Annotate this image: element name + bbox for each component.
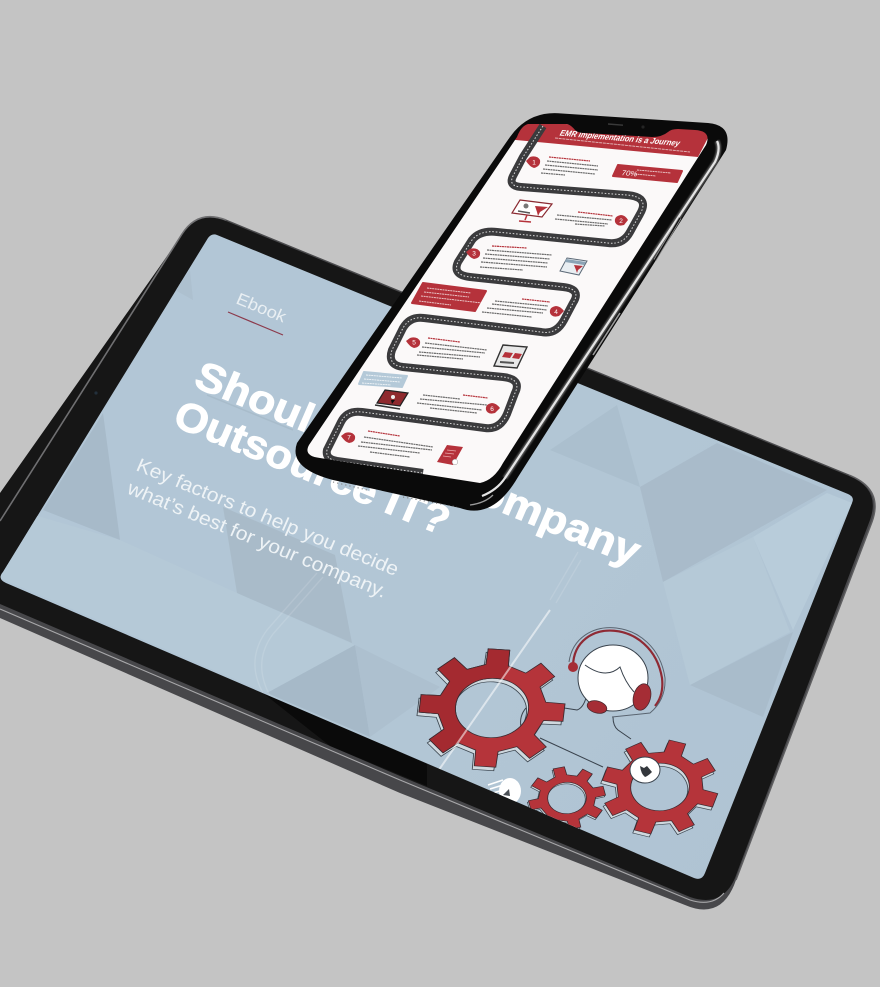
step marker 6: 6 bbox=[490, 406, 494, 413]
header band bbox=[515, 124, 708, 157]
tablet edge highlights bbox=[0, 217, 875, 902]
tablet black bezel bbox=[0, 218, 873, 900]
step marker 4 bbox=[550, 306, 564, 317]
microphone bbox=[586, 700, 608, 714]
step 4 copy lines bbox=[482, 299, 550, 317]
step marker 3 bbox=[466, 248, 480, 259]
tablet metal body bbox=[0, 217, 875, 909]
screen base bbox=[0, 220, 870, 890]
step marker 1: 1 bbox=[532, 160, 536, 166]
polygon facet background bbox=[0, 270, 852, 737]
step marker 5 bbox=[406, 337, 420, 348]
step marker 4: 4 bbox=[554, 309, 558, 316]
icon: red document bbox=[437, 445, 463, 465]
phone body bbox=[296, 113, 728, 511]
tablet bbox=[0, 217, 875, 909]
gear: large bbox=[416, 648, 566, 772]
connecting wires bbox=[521, 698, 631, 767]
tablet camera bbox=[94, 391, 98, 395]
shield badge bbox=[630, 757, 660, 783]
step 6 copy lines bbox=[417, 395, 488, 413]
headband outline bbox=[569, 628, 665, 717]
screen paper bbox=[307, 124, 708, 483]
icon: monitor with funnel bbox=[512, 200, 552, 222]
tablet screen bbox=[0, 220, 870, 890]
ear cup bbox=[632, 683, 652, 711]
phone screen bbox=[307, 124, 708, 483]
icon: tablet dashboard bbox=[494, 345, 527, 368]
phone speaker bbox=[608, 124, 623, 125]
step marker 2 bbox=[615, 215, 628, 226]
headband bbox=[573, 631, 662, 706]
callout: 70 percent: 70% bbox=[620, 169, 639, 178]
phone side highlights bbox=[333, 141, 719, 507]
phone camera bbox=[641, 125, 645, 129]
hair line bbox=[585, 665, 634, 692]
phone reflection on screen bbox=[255, 552, 581, 696]
road bbox=[327, 126, 643, 473]
icon: report chart bbox=[560, 258, 587, 275]
headband end bbox=[568, 662, 578, 672]
step marker 5: 5 bbox=[412, 340, 416, 346]
gear: right with shield bbox=[600, 740, 718, 838]
step marker 6 bbox=[486, 403, 500, 414]
step 2 copy lines bbox=[555, 212, 613, 226]
Ebook label: Ebook bbox=[233, 289, 290, 326]
step marker 1 bbox=[526, 156, 540, 168]
subtitle line 2: what’s best for your company. bbox=[123, 478, 390, 602]
title line 2: Outsource IT? bbox=[168, 392, 457, 544]
subtitle line 1: Key factors to help you decide bbox=[133, 455, 402, 581]
phone bbox=[290, 113, 728, 511]
step 5 copy lines bbox=[417, 338, 487, 359]
title line 1: Should Your Company bbox=[189, 353, 648, 574]
step 7 copy lines bbox=[358, 431, 433, 457]
rocket badge bbox=[488, 778, 521, 804]
step 1 copy lines bbox=[541, 157, 598, 175]
step marker 7: 7 bbox=[347, 434, 351, 442]
head bbox=[578, 645, 648, 711]
title bbox=[176, 363, 642, 568]
bezel reflection bbox=[263, 693, 427, 786]
header subtitle lines bbox=[555, 138, 690, 152]
header title: EMR Implementation is a Journey bbox=[558, 128, 682, 148]
callout: red note bbox=[412, 283, 486, 311]
step marker 3: 3 bbox=[472, 250, 476, 258]
step marker 2: 2 bbox=[619, 218, 623, 225]
callout: blue note bbox=[359, 372, 407, 387]
screen reflection line bbox=[438, 610, 551, 770]
gear: small bbox=[527, 766, 606, 829]
icon: red laptop bbox=[375, 390, 408, 409]
headset agent bbox=[568, 628, 665, 717]
step 3 copy lines bbox=[480, 246, 552, 270]
callout: 70 percent bbox=[613, 165, 682, 182]
Ebook underline bbox=[228, 312, 283, 335]
step marker 7 bbox=[341, 432, 355, 443]
